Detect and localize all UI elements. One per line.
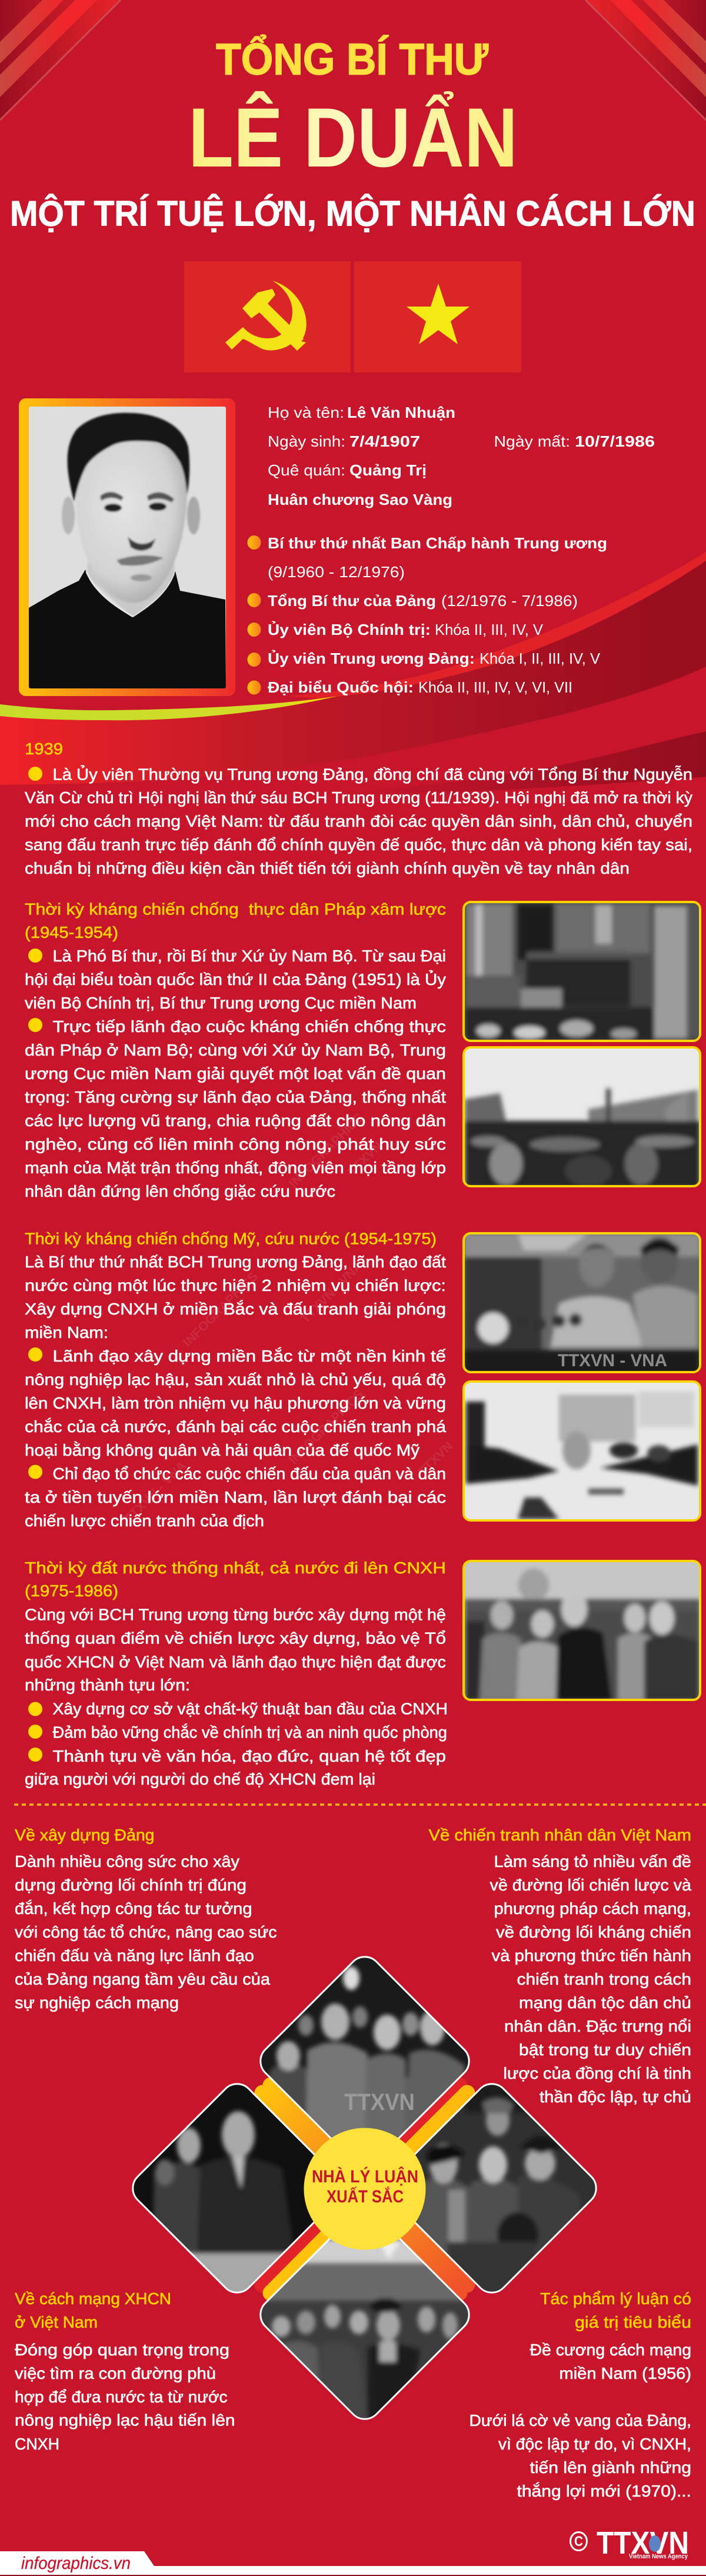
section: anti-American resistance 1954-1975: ta ở tiền tuyến lớn miền Nam, lần lượt đánh bại các [25,1488,446,1506]
photo diamond: bottom [259,2238,470,2420]
faint agency watermarks: INFOGRAPHICS [286,1110,367,1191]
theorist block: party building [15,1826,277,2012]
portrait photo of Lê Duẩn [19,398,235,696]
section: reunification and socialism 1975-1986: Xây dựng cơ sở vật chất-kỹ thuật ban đầu của CNXH [53,1699,448,1718]
section: 1939: 1939 [25,740,63,758]
section: anti-French resistance 1945-1954: các lực lượng vũ trang, chia ruộng đất cho nông dân [25,1111,446,1130]
photo diamond: top [259,1956,470,2139]
photo diamond: left [132,2083,315,2294]
photo: crowd of soldiers [464,1047,700,1189]
faint agency watermarks [121,1110,456,1526]
title: LÊ DUẨN [188,91,518,185]
theorist block: people's war: chiến tranh trong cách [517,1970,691,1988]
section: anti-American resistance 1954-1975: Thời kỳ kháng chiến chống Mỹ, cứu nước (1954-1975) [25,1230,437,1247]
section: 1939: sang đấu tranh trực tiếp đánh đổ chính quyền đế quốc, thực dân và phong kiến tay sai, [25,836,692,854]
career positions list: Đại biểu Quốc hội: [268,678,414,696]
theorist block: socialist revolution: hợp để đưa nước ta từ nước [15,2388,227,2406]
theorist block: representative works: Dưới lá cờ vẻ vang của Đảng, [469,2411,691,2429]
faint agency watermarks: INFOGRAPHICS [180,1269,261,1350]
badge: excellent theorist: XUẤT SẮC [327,2186,404,2206]
section: anti-French resistance 1945-1954: (1945-1954) [25,923,118,941]
title [10,34,695,233]
theorist block: socialist revolution: CNXH [15,2435,59,2453]
theorist block: people's war [428,1826,691,2106]
section: 1939: Văn Cừ chủ trì Hội nghị lần thứ sáu BCH Trung ương (11/1939). Hội nghị đã mở ra thời kỳ [25,788,692,807]
career positions list: Ủy viên Trung ương Đảng: [268,649,475,667]
section: 1939 [25,740,692,877]
theorist block: party building: chiến đấu và năng lực lãnh đạo [15,1946,254,1965]
section: anti-French resistance 1945-1954: Là Phó Bí thư, rồi Bí thư Xứ ủy Nam Bộ. Từ sau Đại [53,947,446,965]
theorist block: party building: sự nghiệp cách mạng [15,1993,179,2012]
theorist block: socialist revolution: Về cách mạng XHCN [15,2289,171,2308]
career positions list: (9/1960 - 12/1976) [268,563,405,581]
theorist block: people's war: mạng dân tộc dân chủ [519,1993,691,2012]
section: reunification and socialism 1975-1986: những thành tựu lớn: [25,1676,190,1694]
section: anti-French resistance 1945-1954: Thời kỳ kháng chiến chống thực dân Pháp xâm lược [25,900,446,918]
theorist block: people's war: lược của đồng chí là tinh [504,2064,691,2082]
theorist block: party building: Về xây dựng Đảng [15,1826,154,1844]
theorist block: people's war: phương pháp cách mạng, [494,1899,691,1918]
theorist block: representative works: vì độc lập tự do, vì CNXH, [498,2435,691,2453]
decorative ribbon: top left corner [0,0,121,120]
section: reunification and socialism 1975-1986: Thời kỳ đất nước thống nhất, cả nước đi lên CNXH [25,1559,446,1577]
personal information: Quê quán: [268,461,345,479]
theorist block: socialist revolution: ở Việt Nam [15,2313,98,2331]
photo: speaker at podium [464,1233,700,1376]
personal information: Lê Văn Nhuận [347,404,455,421]
theorist block: people's war: Làm sáng tỏ nhiều vấn đề [494,1852,691,1871]
footer: infographics.vn bar [0,2551,706,2576]
section: anti-American resistance 1954-1975: nước cùng một lúc thực hiện 2 nhiệm vụ chiến lược: [25,1276,446,1294]
central emblem: ribbons, photo diamonds and badge [126,1948,603,2427]
career positions list: Tổng Bí thư của Đảng [268,592,436,610]
theorist block: socialist revolution: nông nghiệp lạc hậu tiến lên [15,2411,235,2429]
theorist block: party building: với công tác tổ chức, nâng cao sức [15,1923,277,1941]
personal information: Ngày mất: [494,432,570,450]
photo diamond: top: TTXVN [344,2089,415,2115]
section: anti-American resistance 1954-1975: Xây dựng CNXH ở miền Bắc và đấu tranh giải phóng [25,1300,446,1318]
theorist block: people's war: thần độc lập, tự chủ [540,2088,691,2106]
section: 1939: Là Ủy viên Thường vụ Trung ương Đảng, đồng chí đã cùng với Tổng Bí thư Nguyễn [53,765,692,784]
decorative swoosh background [0,552,706,794]
section: anti-French resistance 1945-1954: trọng: Tăng cường sự lãnh đạo của Đảng, thống nhất [25,1088,446,1106]
faint agency watermarks: TTXVN - VNA [121,1458,189,1526]
section: anti-French resistance 1945-1954: Trực tiếp lãnh đạo cuộc kháng chiến chống thực [53,1017,446,1036]
faint agency watermarks: TTXVN [345,1139,385,1179]
career positions list: Khóa II, III, IV, V, VI, VII [418,678,572,696]
footer: infographics.vn bar: infographics.vn [21,2554,131,2573]
photo: Lê Duẩn among people [464,1561,700,1702]
logo: TTXVN: Vietnam News Agency [629,2553,688,2560]
icon: national flag with star [354,261,521,372]
theorist block: socialist revolution: việc tìm ra con đường phù [15,2364,216,2382]
section: anti-American resistance 1954-1975 [25,1230,446,1530]
theorist block: party building: đắn, kết hợp công tác tư tưởng [15,1899,252,1918]
theorist block: people's war: và phương thức tiến hành [492,1946,691,1965]
section: reunification and socialism 1975-1986: quốc XHCN ở Việt Nam và lãnh đạo thực hiện đạt được [25,1653,446,1671]
section: reunification and socialism 1975-1986: Thành tựu về văn hóa, đạo đức, quan hệ tốt đẹp [53,1747,446,1765]
section: 1939: chuẩn bị những điều kiện cần thiết tiến tới giành chính quyền về tay nhân dân [25,859,630,877]
theorist block: people's war: về đường lối kháng chiến [496,1923,691,1941]
photo: speaker at podium: TTXVN - VNA [558,1351,667,1370]
section: anti-American resistance 1954-1975: hoại bằng không quân và hải quân của đế quốc Mỹ [25,1441,419,1459]
badge: excellent theorist: NHÀ LÝ LUẬN [312,2166,418,2186]
section: anti-American resistance 1954-1975: chắc của cả nước, đánh bại các cuộc chiến tranh phá [25,1417,446,1436]
section: reunification and socialism 1975-1986: Đảm bảo vững chắc về chính trị và an ninh quốc phòng [53,1723,447,1742]
section: anti-French resistance 1945-1954: dân Pháp ở Nam Bộ; cùng với Xứ ủy Nam Bộ, Trung [25,1041,446,1059]
section: reunification and socialism 1975-1986: Cùng với BCH Trung ương từng bước xây dựng một hệ [25,1605,446,1624]
theorist block: representative works [469,2289,691,2500]
personal information: Quảng Trị [349,461,427,479]
personal information: 10/7/1986 [575,432,655,450]
faint agency watermarks: INFOGRAPHICS [286,1387,367,1467]
section: anti-American resistance 1954-1975: Là Bí thư thứ nhất BCH Trung ương Đảng, lãnh đạo đất [25,1253,446,1271]
section: anti-French resistance 1945-1954 [25,900,446,1200]
career positions list: Ủy viên Bộ Chính trị: [268,620,431,638]
personal information: Họ và tên: [268,404,344,421]
personal information: Huân chương Sao Vàng [268,491,452,508]
section: anti-French resistance 1945-1954: mạnh của Mặt trận thống nhất, động viên mọi tầng lớp [25,1159,446,1177]
theorist block: representative works: Tác phẩm lý luận có [540,2289,691,2308]
photo: party congress hall [464,902,700,1041]
personal information: 7/4/1907 [349,432,420,450]
logo: TTXVN: TTXVN [597,2525,689,2561]
section: anti-American resistance 1954-1975: chiến lược chiến tranh của địch [25,1512,264,1530]
personal information [268,404,655,508]
theorist block: representative works: Đề cương cách mạng [530,2341,691,2359]
section: anti-American resistance 1954-1975: miền Nam: [25,1323,108,1342]
theorist block: representative works: thắng lợi mới (1970)... [517,2482,691,2500]
title: TỔNG BÍ THƯ [216,34,489,84]
logo: TTXVN: C [574,2534,583,2550]
career positions list: Khóa II, III, IV, V [435,621,544,638]
faint agency watermarks: TTXVN [415,1439,456,1479]
section: anti-American resistance 1954-1975: lên CNXH, làm tròn nhiệm vụ hậu phương lớn và vững [25,1394,446,1412]
decorative ribbon: top right corner [585,0,706,120]
theorist block: people's war: về đường lối chiến lược và [489,1876,691,1894]
career positions list [247,534,607,696]
theorist block: socialist revolution: Đóng góp quan trọng trong [15,2341,229,2359]
theorist block: party building: dựng đường lối chính trị đúng [15,1876,247,1894]
photo: meeting around a table [464,1382,700,1520]
photo diamond: right [414,2083,597,2294]
section: anti-American resistance 1954-1975: Chỉ đạo tổ chức các cuộc chiến đấu của quân và dân [53,1465,446,1483]
badge: excellent theorist [304,2128,426,2250]
section: anti-French resistance 1945-1954: ương Cục miền Nam giải quyết một loạt vấn đề quan [25,1064,446,1083]
theorist block: representative works: giá trị tiêu biểu [575,2313,691,2331]
theorist block: people's war: bật trong tư duy chiến [519,2041,691,2059]
theorist block: party building: Dành nhiều công sức cho xây [15,1852,239,1871]
icon: party flag with hammer and sickle [184,261,351,372]
theorist block: socialist revolution [15,2289,235,2453]
section: anti-French resistance 1945-1954: nhân dân đứng lên chống giặc cứu nước [25,1182,335,1200]
section: anti-American resistance 1954-1975: nông nghiệp lạc hậu, sản xuất nhỏ là chủ yếu, quá độ [25,1370,446,1389]
theorist block: party building: của Đảng ngang tầm yêu cầu của [15,1970,270,1988]
career positions list: Khóa I, II, III, IV, V [479,650,601,667]
portrait image [29,407,226,688]
section: reunification and socialism 1975-1986: giữa người với người do chế độ XHCN đem lại [25,1770,375,1788]
section: anti-French resistance 1945-1954: nghèo, củng cố liên minh công nông, phát huy sức [25,1135,446,1153]
section: reunification and socialism 1975-1986: thống quan điểm về chiến lược xây dựng, bảo vệ Tổ [25,1629,446,1648]
theorist block: people's war: nhân dân. Đặc trưng nổi [504,2017,691,2035]
theorist block: representative works: tiến lên giành những [530,2458,691,2477]
theorist block: people's war: Về chiến tranh nhân dân Việt Nam [428,1826,691,1844]
section: anti-French resistance 1945-1954: hội đại biểu toàn quốc lần thứ II của Đảng (1951) là Ủy [25,970,446,989]
ribbons behind photos [262,2085,467,2293]
section: 1939: mới cho cách mạng Việt Nam: từ đấu tranh đòi các quyền dân sinh, dân chủ, chuyển [25,812,692,830]
career positions list: Bí thư thứ nhất Ban Chấp hành Trung ương [268,534,607,552]
portrait frame [19,398,235,696]
faint agency watermarks: TTXVN - VNA [298,1258,365,1326]
career positions list: (12/1976 - 7/1986) [441,592,578,610]
section: reunification and socialism 1975-1986 [25,1559,448,1788]
theorist block: representative works: miền Nam (1956) [559,2364,691,2382]
personal information: Ngày sinh: [268,432,345,450]
section: reunification and socialism 1975-1986: (1975-1986) [25,1582,118,1600]
section: anti-French resistance 1945-1954: viên Bộ Chính trị, Bí thư Trung ương Cục miền Nam [25,994,417,1012]
section: anti-American resistance 1954-1975: Lãnh đạo xây dựng miền Bắc từ một nền kinh tế [53,1347,446,1365]
